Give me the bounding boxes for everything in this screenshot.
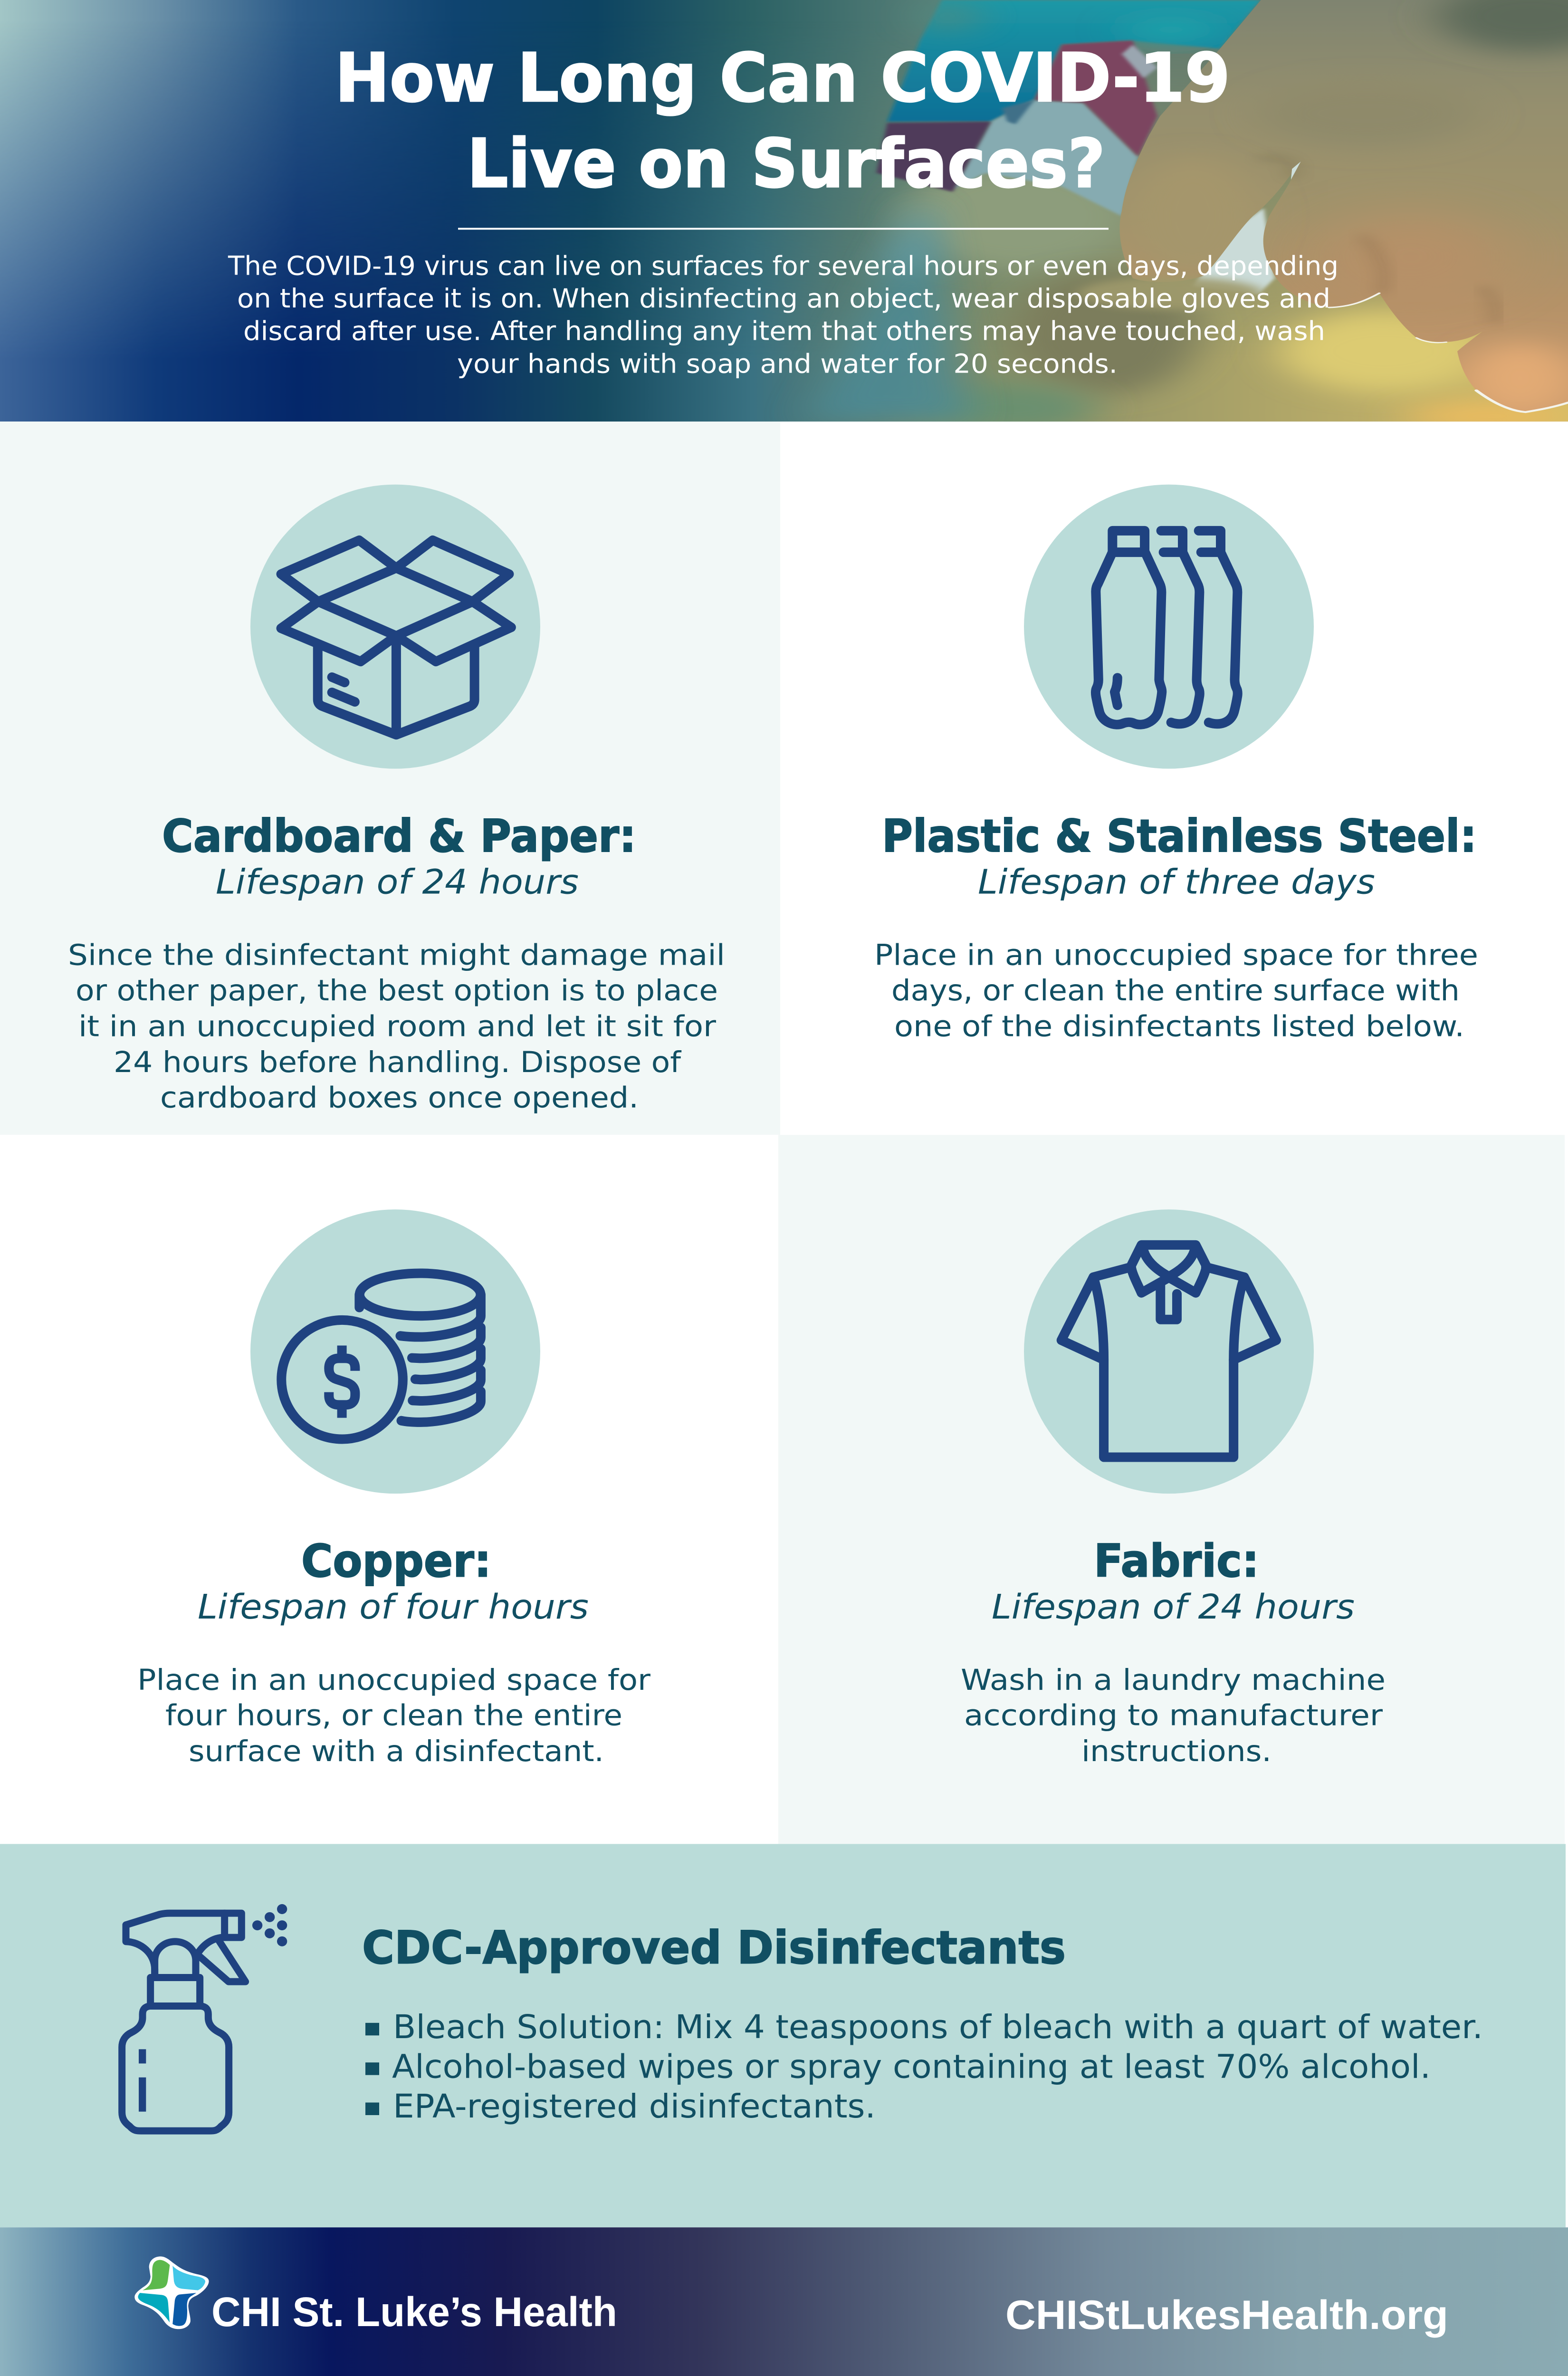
body text: cardboard: Since the disinfectant might damage mail [68, 939, 725, 972]
lifespan: 24 hours: Lifespan of 24 hours [992, 1588, 1355, 1627]
lifespan: four hours: Lifespan of four hours [198, 1588, 589, 1627]
body text: plastic: days, or clean the entire surface with [891, 974, 1460, 1007]
logo mark [134, 2256, 209, 2329]
website: CHIStLukesHealth.org [1005, 2292, 1448, 2338]
body text: fabric: according to manufacturer [964, 1699, 1383, 1732]
intro paragraph: your hands with soap and water for 20 seconds. [457, 349, 1118, 379]
footer [0, 2227, 1568, 2376]
body text: cardboard: or other paper, the best option is to place [76, 974, 718, 1007]
panel: copper [0, 1135, 778, 1844]
title [335, 39, 1230, 203]
lifespan: 24 hours: Lifespan of 24 hours [216, 862, 579, 902]
heading: copper: Copper: [301, 1536, 491, 1587]
bullet list [365, 2009, 1483, 2126]
body text: plastic: one of the disinfectants listed below. [894, 1010, 1464, 1043]
body text: copper: Place in an unoccupied space for [137, 1663, 651, 1697]
bullet list: EPA-registered disinfectants. [393, 2088, 876, 2126]
heading: fabric: Fabric: [1094, 1536, 1259, 1587]
panel: fabric [778, 1135, 1565, 1844]
panel: CDC-approved disinfectants [0, 1844, 1566, 2227]
body text: fabric: Wash in a laundry machine [961, 1663, 1386, 1697]
intro paragraph: The COVID-19 virus can live on surfaces for several hours or even days, depending [228, 251, 1339, 281]
body text: fabric [961, 1663, 1386, 1768]
body text: cardboard: cardboard boxes once opened. [160, 1081, 639, 1114]
body text: copper: four hours, or clean the entire [165, 1699, 622, 1732]
lifespan: three days: Lifespan of three days [978, 862, 1375, 902]
body text: fabric: instructions. [1081, 1734, 1272, 1768]
header photo background [0, 0, 1568, 432]
icon: polo shirt [1024, 1209, 1314, 1494]
intro paragraph: discard after use. After handling any item that others may have touched, wash [243, 316, 1325, 347]
bullet list: Alcohol-based wipes or spray containing at least 70% alcohol. [392, 2048, 1431, 2086]
icon: open cardboard box [250, 485, 540, 769]
panel: cardboard and paper [0, 422, 780, 1135]
icon: spray bottle [122, 1904, 287, 2131]
icon: coins [250, 1209, 540, 1494]
heading: CDC-approved disinfectants: CDC-Approved Disinfectants [362, 1921, 1066, 1974]
body text: copper [137, 1663, 651, 1768]
panel: plastic and stainless steel [780, 422, 1568, 1135]
intro paragraph [228, 251, 1339, 379]
body text: cardboard: 24 hours before handling. Dispose of [114, 1045, 681, 1079]
intro paragraph: on the surface it is on. When disinfecting an object, wear disposable gloves and [237, 284, 1330, 314]
body text: copper: surface with a disinfectant. [189, 1734, 604, 1768]
body text: plastic: Place in an unoccupied space for three [874, 939, 1478, 972]
icon: plastic bottles [1024, 485, 1314, 769]
body text: plastic [874, 939, 1478, 1043]
heading: plastic and stainless steel: Plastic & Stainless Steel: [882, 811, 1477, 862]
logo wordmark: CHI St. Luke’s Health [211, 2289, 617, 2335]
header panel [0, 0, 1568, 432]
heading: cardboard and paper: Cardboard & Paper: [162, 811, 636, 862]
title: Live on Surfaces? [467, 125, 1105, 203]
bullet list: Bleach Solution: Mix 4 teaspoons of bleach with a quart of water. [393, 2009, 1483, 2046]
body text: cardboard [68, 939, 725, 1114]
title: How Long Can COVID-19 [335, 39, 1230, 117]
body text: cardboard: it in an unoccupied room and let it sit for [78, 1010, 717, 1043]
